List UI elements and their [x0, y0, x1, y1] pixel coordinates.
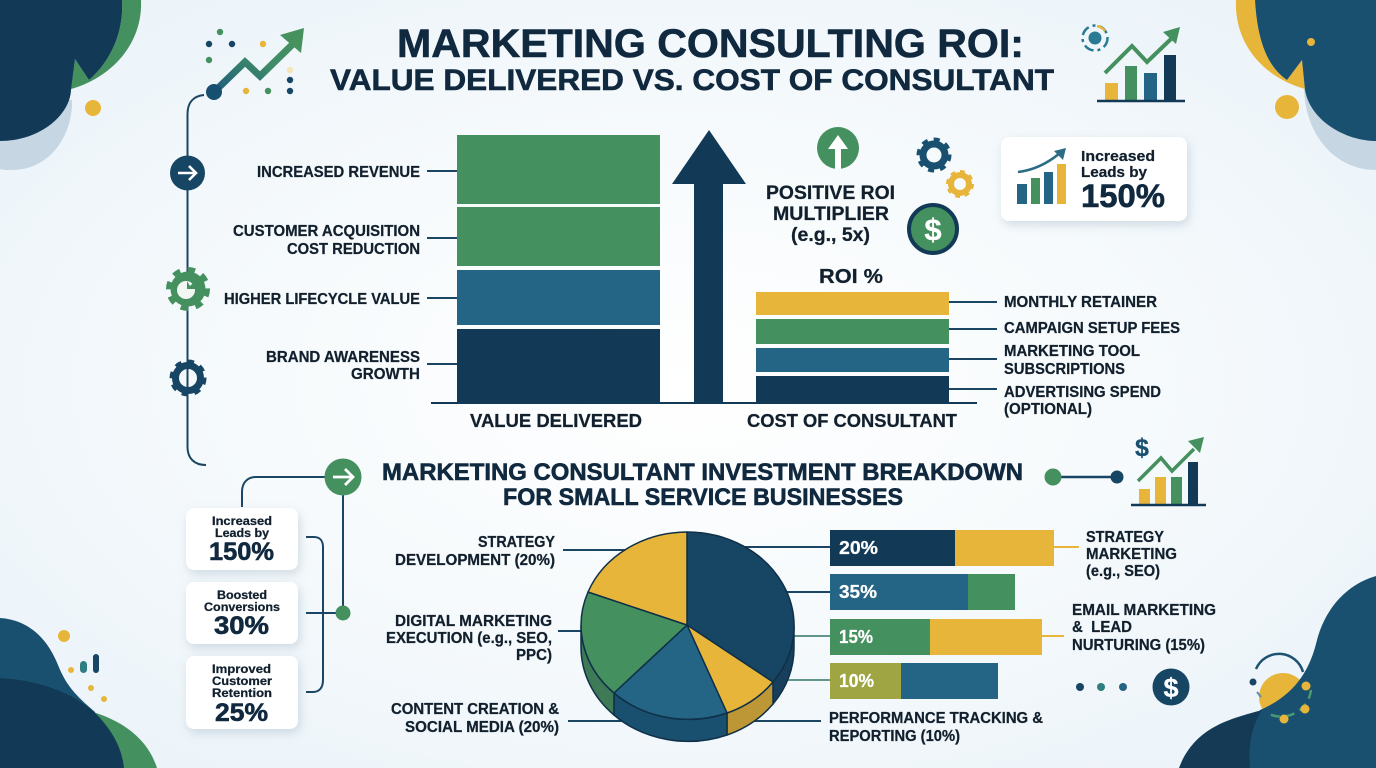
axis labels: [470, 411, 957, 431]
pie labels: left: DIGITAL MARKETING: [395, 613, 552, 630]
left labels: value drivers: HIGHER LIFECYCLE VALUE: [224, 291, 420, 308]
card: increased leads: Leads by: [215, 528, 270, 540]
connector: lower left: [242, 458, 362, 692]
left labels: value drivers: BRAND AWARENESS: [266, 349, 420, 366]
cost labels: (OPTIONAL): [1004, 401, 1092, 418]
card: boosted conversions: [186, 582, 298, 644]
axis labels: COST OF CONSULTANT: [747, 411, 957, 431]
decorative blob: top right: [1236, 0, 1376, 170]
text: positive ROI multiplier: POSITIVE ROI: [766, 183, 895, 204]
text: positive ROI multiplier: (e.g., 5x): [791, 225, 870, 246]
icon: green gear: [169, 270, 207, 308]
bar labels: right: (e.g., SEO): [1086, 563, 1160, 580]
text: ROI percent: ROI %: [819, 266, 883, 288]
bar: 35 percent: 35%: [839, 582, 877, 602]
icon: top right chart: [1082, 26, 1185, 101]
card: improved retention: [186, 656, 298, 729]
icon: navy gear: [172, 362, 204, 394]
left labels: value drivers: [224, 164, 457, 383]
card: improved retention: Improved: [212, 664, 271, 676]
bar: 15 percent: [830, 619, 1064, 655]
card: increased leads: [186, 508, 298, 570]
callout: increased leads: 150%: [1081, 178, 1165, 214]
pie labels: left: EXECUTION (e.g., SEO,: [386, 630, 552, 647]
text: positive ROI multiplier: [766, 183, 895, 246]
icon: gears and dollar coin: [909, 140, 972, 253]
pie labels: left: DEVELOPMENT (20%): [395, 552, 555, 569]
label: performance tracking: REPORTING (10%): [829, 728, 960, 745]
pie labels: left: SOCIAL MEDIA (20%): [405, 719, 559, 736]
cost labels: [949, 294, 1180, 418]
label: performance tracking: [829, 710, 1043, 745]
title: MARKETING CONSULTING ROI:: [397, 22, 1024, 66]
pie slices: [581, 532, 794, 719]
left labels: value drivers: COST REDUCTION: [287, 241, 420, 258]
pie labels: left: [386, 534, 559, 736]
bar: 20 percent: [830, 530, 1079, 566]
icon: lower right chart with connector: [1044, 434, 1206, 505]
cost labels: CAMPAIGN SETUP FEES: [1004, 320, 1180, 337]
bar labels: right: STRATEGY: [1086, 529, 1165, 546]
icon: green up arrow: [817, 127, 859, 169]
bar chart: investment split: [830, 530, 1079, 699]
label: performance tracking: PERFORMANCE TRACKING &: [829, 710, 1043, 727]
arrow: big upward: [672, 130, 746, 403]
section heading: MARKETING CONSULTANT INVESTMENT BREAKDOWN: [382, 459, 1023, 486]
bar: 35 percent: [830, 574, 1015, 610]
icon: gears and dollar coin: $: [924, 212, 942, 247]
pie side walls: [581, 626, 794, 741]
pie labels: left: PPC): [516, 647, 552, 664]
icon: mini bar chart: [1017, 148, 1066, 204]
card: improved retention: Retention: [212, 688, 272, 700]
card: increased leads: 150%: [209, 538, 274, 566]
decorative blob: bottom right: [1179, 576, 1376, 768]
callout: increased leads: [1001, 137, 1187, 221]
bar: 10 percent: 10%: [839, 671, 874, 691]
cost labels: SUBSCRIPTIONS: [1004, 361, 1125, 378]
bar: 10 percent: [830, 663, 998, 699]
leader lines: pie to labels: [558, 547, 830, 721]
stacked bar: value delivered: [457, 135, 660, 403]
cost labels: MONTHLY RETAINER: [1004, 294, 1157, 311]
icon: dots and dollar: $: [1163, 673, 1179, 703]
bar labels: right: & LEAD: [1072, 619, 1132, 636]
bar labels: right: MARKETING: [1086, 546, 1177, 563]
decorative blob: bottom left: [0, 618, 157, 768]
bar labels: right: NURTURING (15%): [1072, 637, 1205, 654]
icon: lower right chart with connector: $: [1135, 434, 1149, 462]
icon: arrow circle: [170, 156, 205, 190]
stacked bar: cost of consultant: [756, 292, 949, 404]
text: positive ROI multiplier: MULTIPLIER: [773, 204, 889, 225]
card: boosted conversions: 30%: [214, 612, 269, 640]
left labels: value drivers: GROWTH: [351, 366, 420, 383]
pie labels: left: STRATEGY: [478, 534, 556, 551]
bar: 15 percent: 15%: [839, 627, 873, 647]
bar: 20 percent: 20%: [839, 538, 878, 558]
left labels: value drivers: CUSTOMER ACQUISITION: [233, 223, 420, 240]
icon: top left growth arrow with dots: [206, 28, 304, 100]
callout: increased leads: Leads by: [1081, 164, 1148, 181]
section heading: FOR SMALL SERVICE BUSINESSES: [503, 484, 903, 511]
left labels: value drivers: INCREASED REVENUE: [257, 164, 420, 181]
cost labels: ADVERTISING SPEND: [1004, 384, 1161, 401]
bar labels: right: EMAIL MARKETING: [1072, 602, 1216, 619]
title: [330, 22, 1054, 97]
card: boosted conversions: Boosted: [217, 590, 267, 602]
cost labels: MARKETING TOOL: [1004, 343, 1140, 360]
icon: dots and dollar: [1076, 668, 1190, 706]
icon: green arrow circle: [324, 458, 362, 496]
decorative blob: top left: [0, 0, 141, 170]
card: increased leads: Increased: [212, 516, 272, 528]
axis labels: VALUE DELIVERED: [470, 411, 642, 431]
section heading: [382, 459, 1023, 511]
card: improved retention: Customer: [212, 676, 273, 688]
card: boosted conversions: Conversions: [204, 602, 280, 614]
bar chart: value vs cost: [431, 130, 977, 404]
bar labels: right: [1072, 529, 1216, 654]
pie labels: left: CONTENT CREATION &: [391, 701, 559, 718]
card: improved retention: 25%: [215, 699, 268, 727]
title: VALUE DELIVERED VS. COST OF CONSULTANT: [330, 64, 1054, 97]
callout: increased leads: Increased: [1081, 148, 1155, 165]
pie chart: [581, 532, 794, 741]
timeline connector: left: [169, 95, 207, 465]
